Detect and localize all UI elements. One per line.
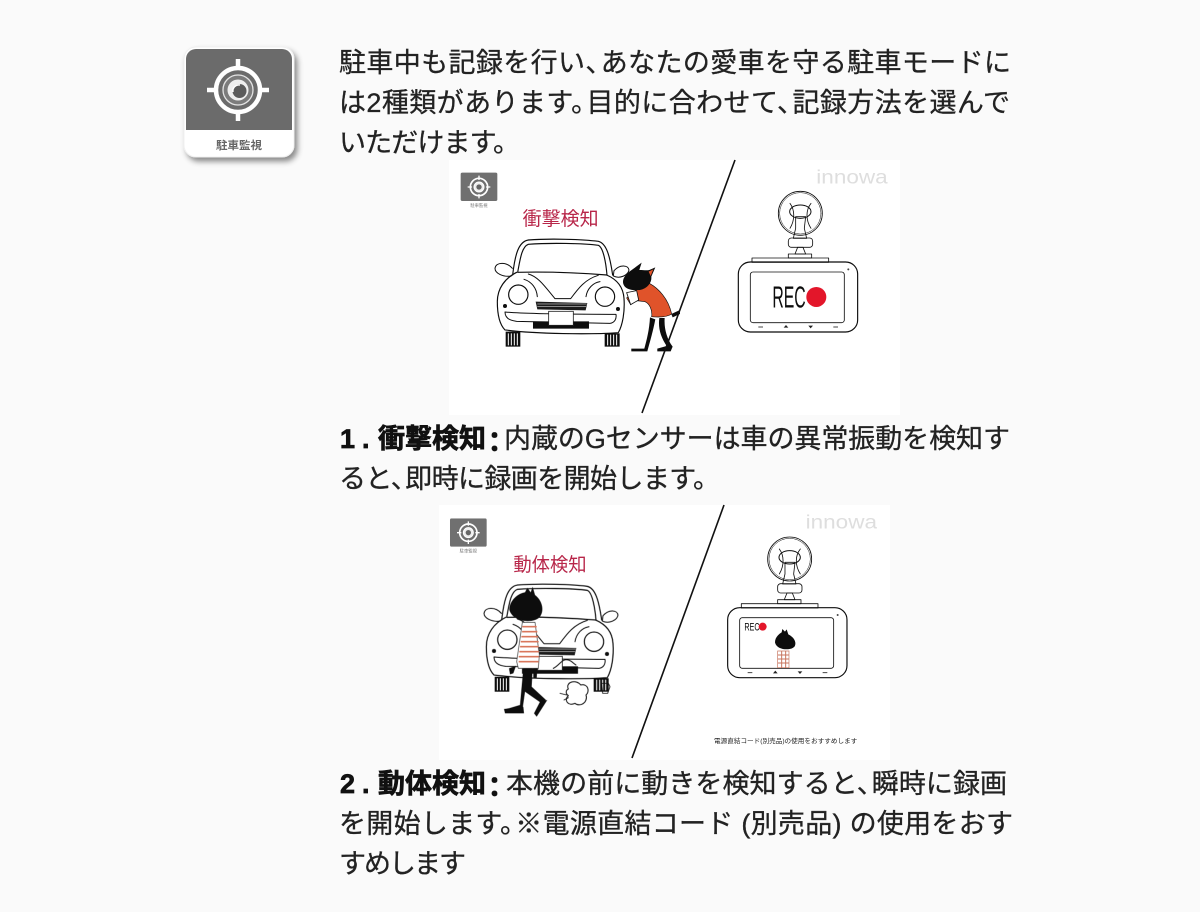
text: shock detection description: ： xyxy=(481,428,508,458)
illustration: motion detection left side: 動体検知 xyxy=(513,554,587,576)
text: motion detection description: . xyxy=(362,769,370,799)
illustration: shock detection left side: 衝撃検知 xyxy=(523,208,599,230)
text: shock detection description: . xyxy=(362,424,370,454)
illustration: dashcam recording xyxy=(738,167,888,332)
illustration: dashcam recording cat: innowa xyxy=(806,512,877,533)
illustration: motion detection left side xyxy=(450,518,618,717)
text: motion detection description: ： xyxy=(481,773,508,803)
intro text block: 駐車中も記録を行い、あなたの愛車を守る駐車モードに xyxy=(339,48,1011,78)
illustration: dashcam recording cat xyxy=(714,512,877,745)
illustration: dashcam recording: REC xyxy=(772,281,806,315)
text: motion detection description: 本機の前に動きを検知すると、瞬時に録画 xyxy=(506,769,1007,799)
text: motion detection description xyxy=(339,769,1013,879)
text: motion detection description: 2 xyxy=(340,769,355,799)
text: shock detection description: 内蔵のGセンサーは車の異常振動を検知す xyxy=(504,424,1010,454)
illustration: shock detection left side xyxy=(461,173,680,351)
text: shock detection description: 衝撃検知 xyxy=(378,424,486,454)
panel: motion detection illustration xyxy=(439,505,890,760)
intro text block: は2種類があります。目的に合わせて、記録方法を選んで xyxy=(339,88,1010,118)
text: shock detection description: ると、即時に録画を開始します。 xyxy=(339,464,720,494)
text: motion detection description: 動体検知 xyxy=(378,769,486,799)
illustration: dashcam recording cat: 電源直結コード(別売品)の使用をおすすめします xyxy=(714,736,857,745)
divider line xyxy=(632,505,724,758)
illustration: dashcam recording: innowa xyxy=(816,167,888,188)
intro text block: いただけます。 xyxy=(339,128,520,158)
panel: shock detection illustration xyxy=(449,160,900,415)
illustration: dashcam recording cat: REC xyxy=(744,622,760,634)
text: shock detection description xyxy=(339,424,1010,494)
divider line xyxy=(642,160,735,413)
intro text block xyxy=(339,48,1011,158)
icon: parking monitor badge: 駐車監視 xyxy=(216,138,262,152)
icon: parking monitor badge xyxy=(184,47,294,157)
text: shock detection description: 1 xyxy=(340,424,355,454)
text: motion detection description: を開始します。※電源直結コード (別売品) の使用をおす xyxy=(339,809,1013,839)
text: motion detection description: すめします xyxy=(339,849,466,879)
